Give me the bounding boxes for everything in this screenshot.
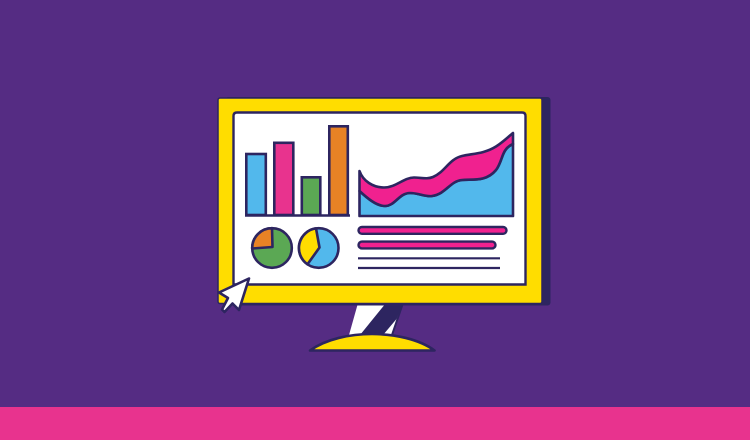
- text lines: [358, 227, 506, 268]
- pink text line short: [358, 242, 496, 248]
- thin text line one: [358, 257, 500, 259]
- monitor base: [310, 334, 434, 350]
- thin text line two: [358, 267, 500, 269]
- pie chart: green and orange: [252, 228, 292, 268]
- bar: blue: [246, 154, 266, 215]
- monitor stand: [349, 303, 403, 335]
- monitor shadow: [225, 97, 550, 306]
- area chart: [360, 133, 513, 216]
- bar: pink: [274, 143, 293, 215]
- area: magenta: [360, 133, 513, 206]
- screen: [234, 112, 526, 284]
- bar: green: [302, 177, 320, 215]
- bar chart: [245, 126, 350, 216]
- pink text line long: [358, 227, 506, 234]
- icon: cursor arrow: [219, 278, 249, 312]
- pie chart: blue and yellow: [299, 228, 339, 268]
- pink footer band: [0, 407, 750, 440]
- bar: orange: [329, 126, 348, 215]
- area: blue: [360, 144, 513, 216]
- monitor frame: [218, 98, 542, 304]
